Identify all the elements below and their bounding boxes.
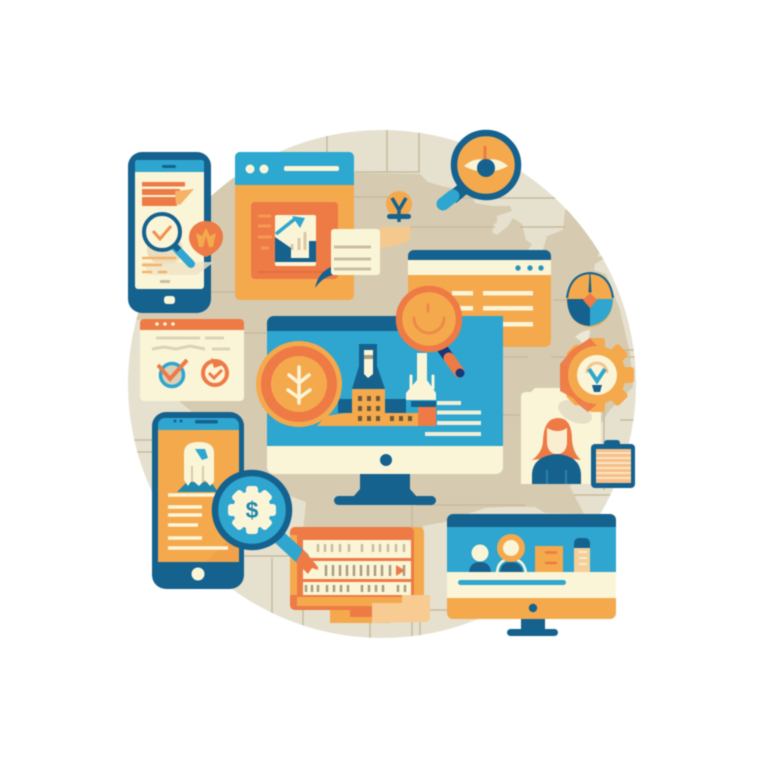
browser window: text lines	[408, 250, 551, 347]
document: woman portrait	[521, 388, 601, 484]
icon: red refresh badge	[203, 358, 227, 385]
shield badge	[189, 221, 223, 257]
phone: document	[152, 412, 244, 589]
magnifier: gear and dollar: $	[246, 497, 259, 523]
infographic illustration	[127, 128, 636, 638]
icon: hand holding bulb	[380, 191, 412, 248]
bottom monitor: team	[447, 514, 616, 636]
hair	[532, 418, 581, 460]
gear: idea bulb	[560, 338, 634, 412]
person one	[469, 544, 491, 572]
person two	[497, 537, 526, 573]
map background	[120, 120, 650, 650]
globe pie icon	[567, 273, 613, 345]
desktop monitor: factory scene	[267, 316, 503, 505]
gear	[228, 486, 276, 534]
magnifier with check	[144, 214, 191, 264]
document	[535, 546, 563, 572]
magnifier: eye	[443, 133, 518, 204]
card: checklist	[140, 319, 244, 401]
coin: leaf emblem	[256, 341, 342, 427]
bottle	[574, 538, 590, 572]
tooth-like document icon	[177, 442, 218, 492]
magnifier: gear and dollar	[215, 473, 318, 574]
phone: search and checklist	[128, 152, 223, 313]
body	[532, 454, 581, 484]
clipboard	[591, 440, 635, 488]
map grid lines	[130, 130, 640, 640]
magnifier: smile	[399, 289, 464, 378]
hand	[372, 595, 430, 623]
factory	[317, 344, 436, 426]
growth document	[275, 215, 316, 266]
land mass	[136, 172, 634, 528]
browser window: growth chart	[235, 152, 380, 300]
icon: blue check	[158, 360, 187, 386]
note card	[331, 229, 380, 275]
bottom card: timeline screen	[290, 527, 430, 623]
